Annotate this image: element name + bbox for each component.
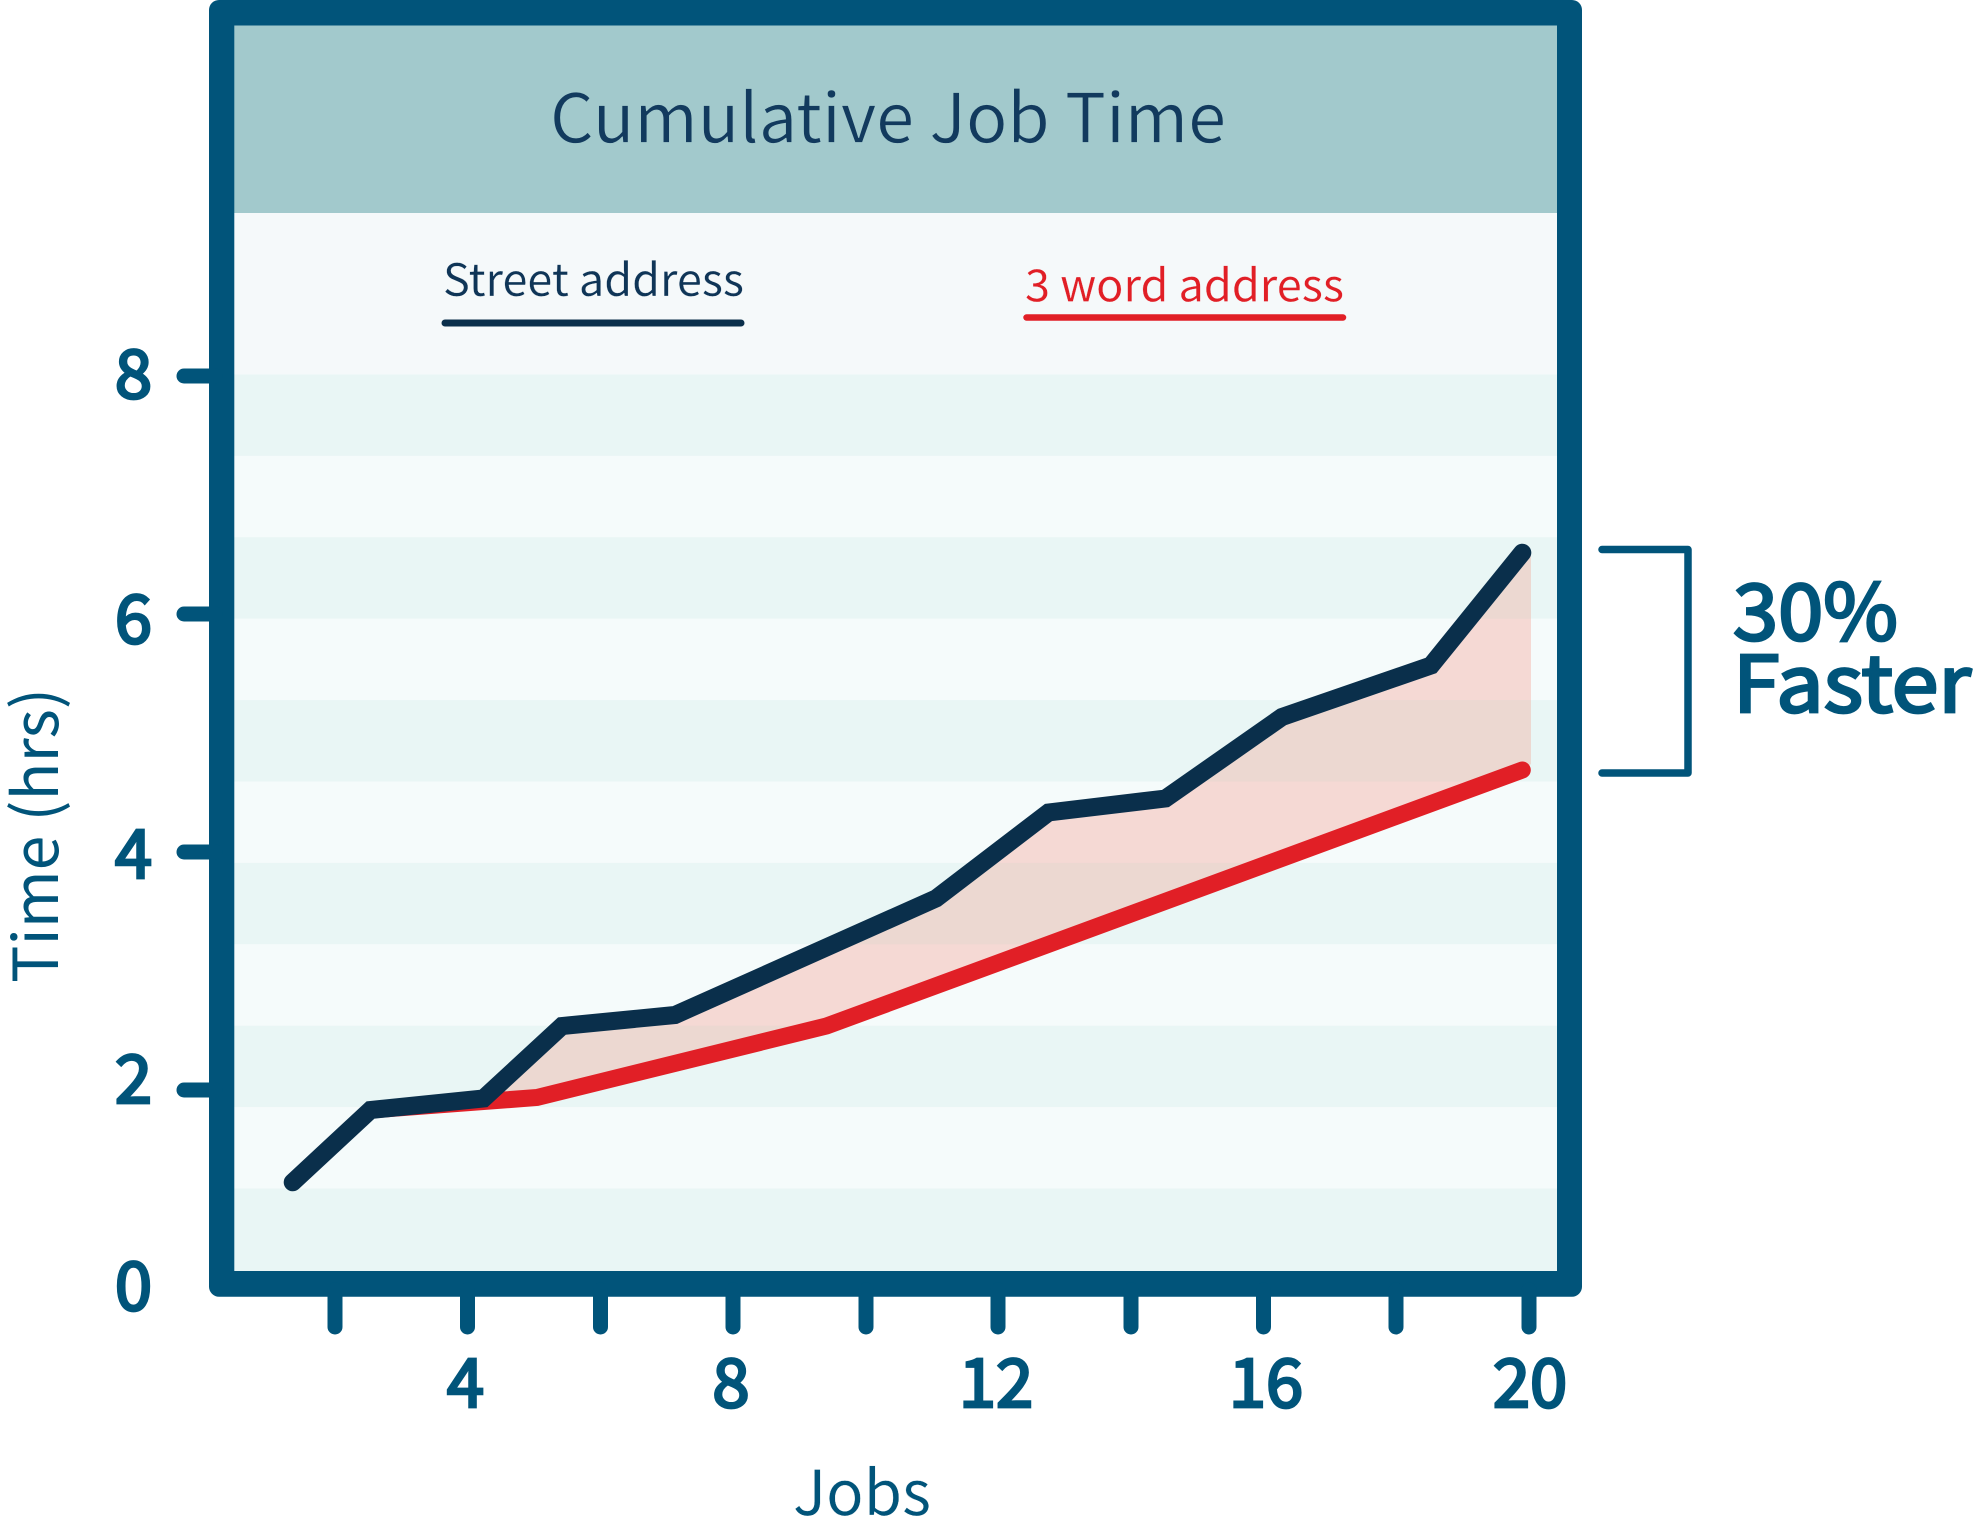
legend: street address: Street address: [443, 244, 744, 309]
line: street address series: [293, 553, 1522, 1182]
x axis title: Jobs: [793, 1443, 931, 1533]
x axis numbers: 20: [1493, 1330, 1567, 1427]
y axis numbers: 8: [115, 321, 152, 418]
y axis numbers: 2: [115, 1026, 152, 1123]
x axis numbers: 4: [447, 1330, 484, 1427]
x axis numbers: 16: [1229, 1330, 1303, 1427]
bracket: difference between series: [1602, 550, 1688, 773]
x axis numbers: 12: [959, 1330, 1033, 1427]
chart frame: [209, 0, 1582, 1297]
title: Cumulative Job Time: [550, 64, 1226, 162]
line: 3 word address series: [370, 770, 1522, 1110]
callout: 30% faster: 30%: [1733, 551, 1898, 663]
y axis ticks: [184, 376, 215, 1090]
callout: 30% faster: Faster: [1733, 623, 1972, 735]
x axis numbers: 8: [712, 1330, 750, 1427]
y axis numbers: 6: [115, 566, 152, 663]
x axis numbers: [447, 1330, 1567, 1427]
shaded area between lines: [504, 556, 1531, 1092]
panel: title header band: [234, 25, 1557, 213]
callout: 30% faster: [1733, 551, 1972, 735]
panel: chart background with bands: [234, 213, 1557, 1271]
y axis numbers: 0: [115, 1233, 152, 1330]
y axis numbers: 4: [115, 801, 152, 898]
legend: 3 word address: 3 word address: [1025, 250, 1344, 314]
x axis ticks: [335, 1290, 1529, 1327]
y axis numbers: [115, 321, 152, 1330]
